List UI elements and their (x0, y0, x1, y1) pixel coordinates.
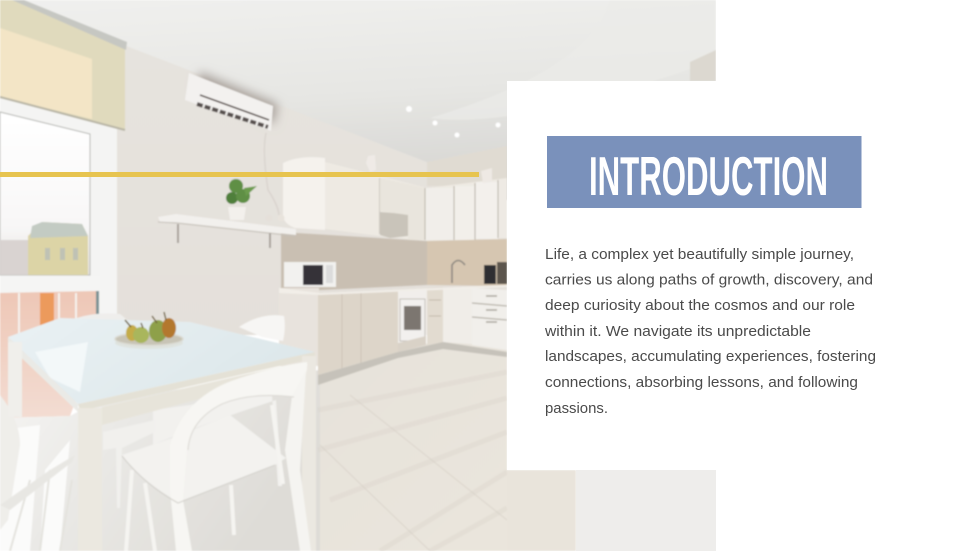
intro paragraph: deep curiosity about the cosmos and our role (545, 297, 855, 314)
intro paragraph: Life, a complex yet beautifully simple journey, (545, 246, 854, 263)
front chair (122, 362, 311, 551)
microwave (284, 262, 336, 287)
wall shelf with plant (158, 179, 296, 248)
panel: white text card (507, 81, 980, 470)
wall (116, 42, 507, 335)
yellow accent line (0, 172, 479, 177)
bowl of pears (115, 312, 183, 346)
lower kitchen cabinets (279, 285, 507, 385)
title banner (547, 136, 862, 208)
lower glass with balcony (0, 291, 98, 418)
floor (0, 340, 576, 551)
distant yellow building (27, 233, 89, 276)
intro paragraph: passions. (545, 400, 608, 417)
back chairs (0, 313, 285, 530)
intro paragraph: connections, absorbing lessons, and following (545, 374, 858, 391)
air conditioner (185, 72, 279, 215)
right wall top band (427, 146, 507, 186)
intro paragraph: landscapes, accumulating experiences, fostering (545, 348, 876, 365)
dining table (8, 318, 316, 551)
lower right wall section (576, 470, 716, 551)
intro paragraph: carries us along paths of growth, discovery, and (545, 272, 873, 288)
window (0, 98, 117, 418)
sink tap and appliances (452, 260, 507, 284)
roller blind (0, 0, 127, 130)
kitchen backsplash (281, 232, 427, 292)
upper kitchen cabinets (283, 155, 507, 241)
ceiling (0, 0, 716, 200)
photo: white kitchen interior (0, 0, 716, 551)
intro paragraph: within it. We navigate its unpredictable (544, 323, 811, 340)
intro paragraph (544, 246, 876, 417)
